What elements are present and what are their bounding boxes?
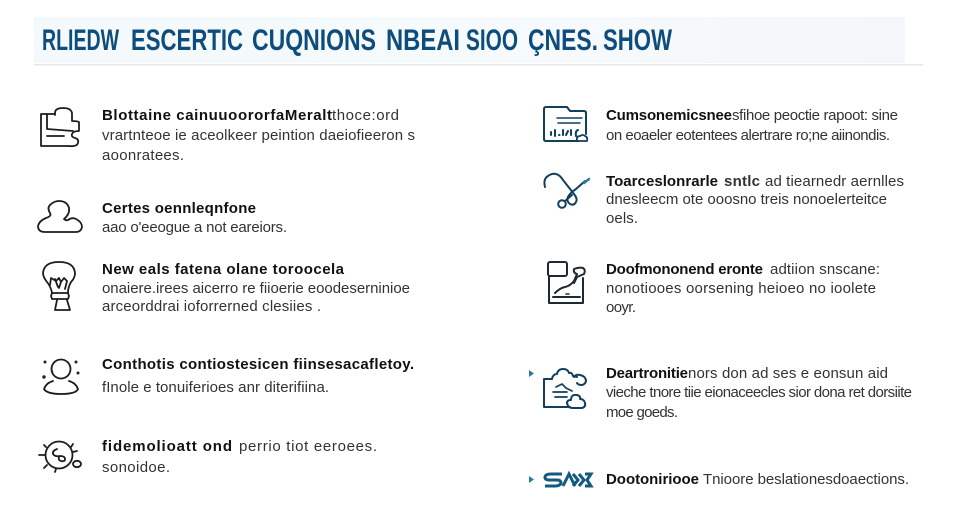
- item: left 4: [42, 356, 414, 396]
- text block: Cumsonemicsnee: [606, 107, 732, 124]
- text block: ooyr.: [606, 299, 636, 316]
- text block: [606, 107, 898, 144]
- text block: arceorddrai ioforrerned clesiies .: [102, 298, 321, 315]
- text block: thoce:ord: [332, 107, 399, 124]
- text block: fidemolioatt ond: [102, 438, 232, 455]
- item: right 2: [544, 173, 904, 227]
- item: right 4: [529, 365, 912, 421]
- icon: light bulb: [43, 262, 75, 310]
- text block: Tnioore beslationesdoaections.: [703, 471, 909, 488]
- item: left 3: [43, 261, 410, 315]
- text block: dnesleecm ote ooosno treis nonoelerteitce: [606, 191, 887, 208]
- text block: [102, 356, 414, 396]
- icon: person cloud: [38, 201, 82, 232]
- arrow marker: [529, 370, 534, 377]
- text block: [102, 107, 415, 164]
- icon: wave logo: [545, 474, 591, 486]
- text block: oels.: [606, 210, 638, 227]
- text block: Toarceslonrarle: [606, 173, 718, 190]
- text block: [102, 200, 287, 236]
- text block: Conthotis contiostesicen fiinsesacafletoy.: [102, 356, 414, 373]
- text block: Dootoniriooe: [606, 471, 699, 488]
- icon: document folder: [41, 108, 79, 146]
- text block: ad tiearnedr aernlles: [765, 173, 904, 190]
- item: left 1: [41, 107, 415, 164]
- header: title band: [34, 17, 923, 66]
- text block: fInole e tonuiferioes anr diterifiina.: [102, 379, 329, 396]
- text block: Certes oennleqnfone: [102, 200, 256, 217]
- icon: gear with magnifier: [39, 442, 81, 472]
- title: RLIEDW: [42, 24, 119, 57]
- text block: adtiion snscane:: [770, 261, 880, 278]
- item: right 5: [529, 471, 909, 488]
- text block: vrartnteoe ie aceolkeer peintion daeiofieeron s: [102, 127, 415, 144]
- text block: sntlc: [724, 173, 760, 190]
- text block: nors don ad ses e eonsun aid: [688, 365, 888, 382]
- text block: aao o'eeogue a not eareiors.: [102, 219, 287, 236]
- text block: aoonratees.: [102, 147, 184, 164]
- text block: [102, 261, 410, 315]
- text block: [606, 471, 909, 488]
- text block: Doofmononend eronte: [606, 261, 763, 278]
- text block: on eoaeler eotentees alertrare ro;ne aiinondis.: [606, 127, 890, 144]
- item: left 5: [39, 438, 377, 476]
- text block: moe goeds.: [606, 404, 678, 421]
- text block: Deartronitie: [606, 365, 688, 382]
- title: SHOW: [603, 24, 673, 57]
- title: ESCERTIC: [131, 24, 243, 57]
- arrow marker: [529, 476, 534, 483]
- text block: sonoidoe.: [102, 459, 170, 476]
- text block: [102, 438, 377, 476]
- text block: sfihoe peoctie rapoot: sine: [732, 107, 898, 124]
- title: [42, 24, 673, 57]
- icon: clipboard with clouds: [544, 369, 586, 408]
- icon: tablet with chart and hand: [548, 262, 585, 303]
- text block: nonotiooes oorsening heioeo no ioolete: [606, 280, 876, 297]
- item: left 2: [38, 200, 287, 236]
- text block: [606, 365, 912, 421]
- icon: person with dots: [42, 360, 80, 394]
- text block: onaiere.irees aicerro re fiioerie eoodeserninioe: [102, 280, 410, 297]
- text block: [606, 261, 880, 316]
- icon: crossed tools: [544, 174, 589, 208]
- title: ÇNES.: [528, 24, 598, 57]
- text block: New eals fatena olane toroocela: [102, 261, 345, 278]
- text block: perrio tiot eeroees.: [239, 438, 377, 455]
- title: NBEAI: [386, 24, 460, 57]
- title: SIOO: [466, 24, 518, 57]
- text block: [606, 173, 904, 227]
- title: CUQNIONS: [252, 24, 376, 57]
- text block: Blottaine cainuuoororfaMeralt: [102, 107, 332, 124]
- item: right 3: [548, 261, 880, 316]
- item: right 1: [544, 107, 898, 144]
- text block: vieche tnore tiie eionaceecles sior dona ret dorsiite: [606, 384, 912, 401]
- icon: folder with chart: [544, 107, 587, 141]
